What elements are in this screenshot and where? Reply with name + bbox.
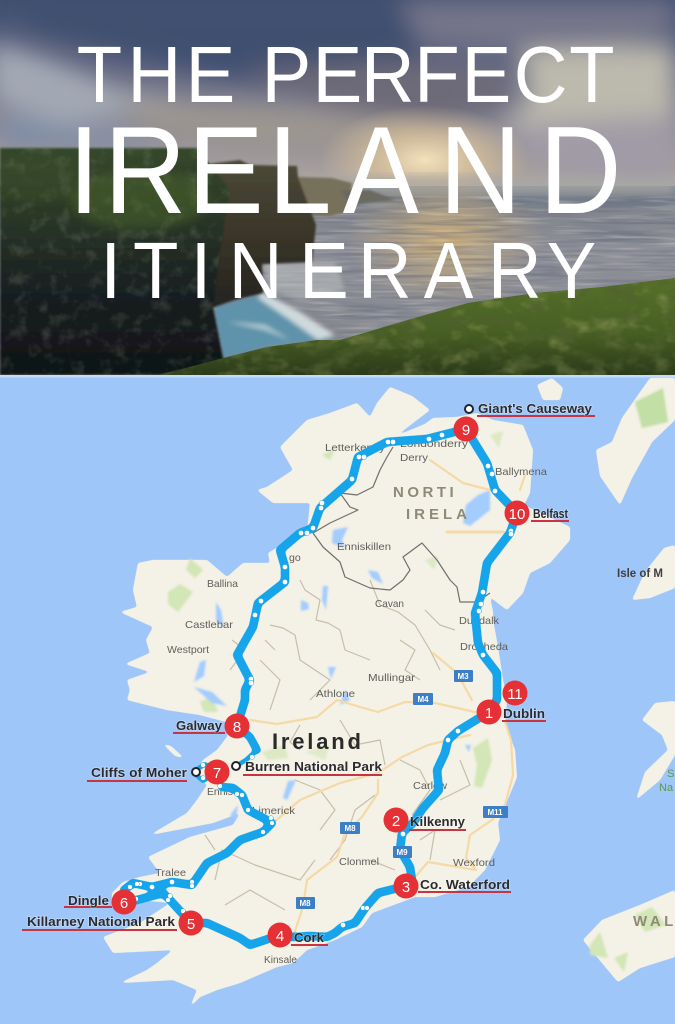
open stop markers (192, 405, 473, 776)
stop name labels: Galway (176, 719, 222, 733)
header photo: cliffs at sunset (0, 0, 675, 375)
county lines (205, 580, 470, 910)
lakes (194, 490, 490, 820)
grass foreground (160, 278, 675, 375)
map place labels: Tralee (155, 867, 186, 879)
pin 2: Kilkenny (384, 808, 408, 832)
title (68, 31, 621, 316)
stop name labels: Giant's Causeway (478, 402, 592, 416)
stop name labels: Dublin (503, 707, 545, 721)
pin 8: Galway (224, 714, 250, 738)
title line: THE PERFECT: THE PERFECT (77, 31, 615, 120)
map place labels: NORTI (393, 484, 457, 501)
pin 10: Belfast (504, 500, 530, 526)
stop name labels (27, 402, 592, 945)
motorway shields: M3 (457, 672, 469, 681)
Lough Neagh (463, 490, 490, 526)
map panel (0, 375, 675, 1024)
pin 3: Co. Waterford (394, 874, 418, 898)
underlines for stops (22, 415, 595, 946)
map place labels: Ireland (272, 729, 364, 754)
map place labels: Dundalk (459, 615, 500, 627)
map place labels: Mullingar (368, 672, 416, 684)
route waypoints (128, 432, 514, 928)
pin 10: Belfast: 10 (509, 506, 525, 523)
title line: IRELAND: IRELAND (68, 102, 621, 240)
map place labels: Castlebar (185, 619, 234, 631)
land: neighbouring islands (163, 378, 675, 982)
pin 4: Cork: 4 (276, 928, 284, 945)
stop name labels: Killarney National Park (27, 915, 175, 929)
stop name labels: Dingle (68, 894, 109, 908)
pin 6: Dingle: 6 (120, 895, 128, 912)
stop name labels: Burren National Park (245, 760, 382, 774)
map place labels (155, 438, 675, 966)
pin 3: Co. Waterford: 3 (402, 879, 410, 896)
map place labels: Clonmel (339, 856, 379, 868)
map place labels: Ballymena (495, 466, 547, 478)
title line: ITINERARY: ITINERARY (100, 227, 596, 316)
map place labels: Cavan (375, 598, 404, 610)
map place labels: Westport (167, 644, 209, 656)
roads (250, 460, 525, 937)
waves (213, 262, 345, 360)
map place labels: Na (659, 782, 674, 794)
green parks (168, 388, 668, 972)
pin 11: Dublin return: 11 (507, 686, 523, 703)
map place labels: IRELA (406, 506, 471, 523)
pin 7: Cliffs of Moher (204, 760, 230, 784)
pin 5: Killarney: 5 (187, 916, 195, 933)
pin 9: Giant's Causeway (454, 416, 478, 442)
sun glow (330, 108, 520, 186)
driving route (124, 429, 517, 945)
map place labels: Londonderry (400, 438, 469, 450)
map place labels: Letterkenny (325, 442, 386, 454)
motorway shields: M9 (396, 848, 408, 857)
map place labels: Derry (400, 452, 429, 464)
pin 2: Kilkenny: 2 (392, 813, 400, 830)
stop name labels: Cork (294, 931, 324, 945)
map place labels: Carlow (413, 780, 447, 792)
map place labels: Ennis (207, 786, 233, 798)
pin 11: Dublin return (502, 680, 528, 706)
stop name labels: Co. Waterford (420, 878, 510, 892)
pin 8: Galway: 8 (233, 719, 241, 736)
numbered stop pins (112, 416, 530, 948)
map place labels: Limerick (252, 805, 296, 817)
pin 6: Dingle (112, 890, 136, 914)
pin 1: Dublin (476, 700, 502, 724)
map place labels: Ballina (207, 578, 238, 590)
map place labels: Drogheda (460, 641, 508, 653)
motorway shields: M11 (487, 808, 503, 817)
map place labels: Wexford (453, 857, 495, 869)
map place labels: Isle of M (617, 568, 663, 580)
headland cliffs (0, 148, 395, 375)
motorway shields: M8 (344, 824, 356, 833)
map place labels: go (289, 552, 301, 564)
map place labels: Kinsale (264, 954, 297, 966)
land: Ireland (103, 387, 570, 1007)
pin 5: Killarney (178, 910, 204, 936)
pin 9: Giant's Causeway: 9 (462, 422, 470, 439)
stop name labels: Belfast (533, 507, 569, 521)
stop name labels: Cliffs of Moher (91, 766, 187, 780)
motorway shields (296, 670, 508, 909)
map place labels: S (667, 768, 674, 780)
map place labels: Athlone (316, 688, 355, 700)
pin 1: Dublin: 1 (485, 705, 493, 722)
sea (0, 175, 675, 375)
motorway shields: M4 (417, 695, 429, 704)
border: Northern Ireland (313, 447, 490, 602)
stop name labels: Kilkenny (410, 815, 465, 829)
map place labels: Enniskillen (337, 541, 391, 553)
motorway shields: M8 (299, 899, 311, 908)
pin 4: Cork (268, 922, 292, 948)
pin 7: Cliffs of Moher: 7 (213, 765, 221, 782)
